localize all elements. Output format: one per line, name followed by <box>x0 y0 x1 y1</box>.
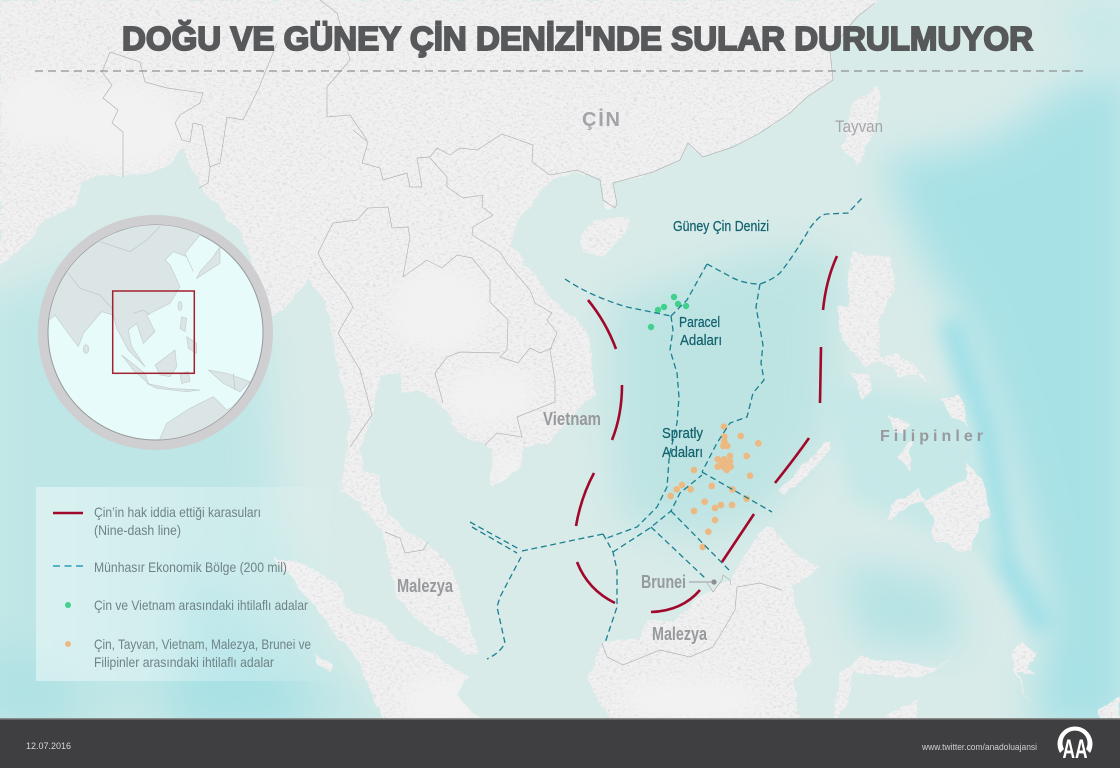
footer twitter url: www.twitter.com/anadoluajansi <box>921 742 1037 753</box>
title: DOĞU VE GÜNEY ÇİN DENİZİ'NDE SULAR DURULMUYOR <box>122 20 1033 58</box>
label: Malaysia Borneo: Malezya <box>652 624 708 644</box>
legend panel <box>36 487 340 681</box>
label: Taiwan: Tayvan <box>835 117 883 136</box>
label: Paracel Islands: Adaları <box>680 332 722 349</box>
label: Spratly Islands: Spratly <box>662 425 703 442</box>
label: Brunei with leader: Brunei <box>641 572 686 592</box>
label: South China Sea: Güney Çin Denizi <box>673 218 769 235</box>
label: Malaysia peninsula: Malezya <box>397 576 454 596</box>
icon: Anadolu Agency logo <box>1058 726 1092 764</box>
footer bar <box>0 718 1120 768</box>
legend: multi-country disputed islands: Filipinler arasındaki ihtilaflı adalar <box>94 654 274 670</box>
map labels <box>397 108 983 644</box>
legend: multi-country disputed islands: Çin, Tayvan, Vietnam, Malezya, Brunei ve <box>94 636 311 652</box>
icon: Anadolu Agency logo: AA <box>1062 734 1088 764</box>
label: Paracel Islands <box>679 314 722 349</box>
label: Spratly Islands: Adaları <box>662 444 703 461</box>
inset globe locator <box>38 215 273 450</box>
label: Philippines: Filipinler <box>880 428 983 445</box>
label: Paracel Islands: Paracel <box>679 314 720 331</box>
legend: nine-dash line: Çin’in hak iddia ettiği karasuları <box>94 504 261 520</box>
exclusive economic zone dashed lines <box>470 197 863 659</box>
disputed islands: orange dots <box>667 423 762 550</box>
country borders <box>102 0 875 665</box>
legend: nine-dash line <box>53 504 261 538</box>
footer date: 12.07.2016 <box>26 741 71 751</box>
disputed islands: green dots <box>648 294 689 330</box>
legend: multi-country disputed islands <box>65 636 311 670</box>
label: China: ÇİN <box>582 108 620 131</box>
label: Vietnam: Vietnam <box>543 409 601 429</box>
inset land <box>49 225 250 440</box>
inset location square <box>113 291 194 373</box>
legend: China-Vietnam disputed islands: Çin ve Vietnam arasındaki ihtilaflı adalar <box>94 597 308 613</box>
label: Spratly Islands <box>662 425 703 461</box>
legend: nine-dash line: (Nine-dash line) <box>94 522 181 538</box>
legend: exclusive economic zone: Münhasır Ekonomik Bölge (200 mil) <box>94 559 287 575</box>
nine-dash line red segments <box>576 256 837 612</box>
